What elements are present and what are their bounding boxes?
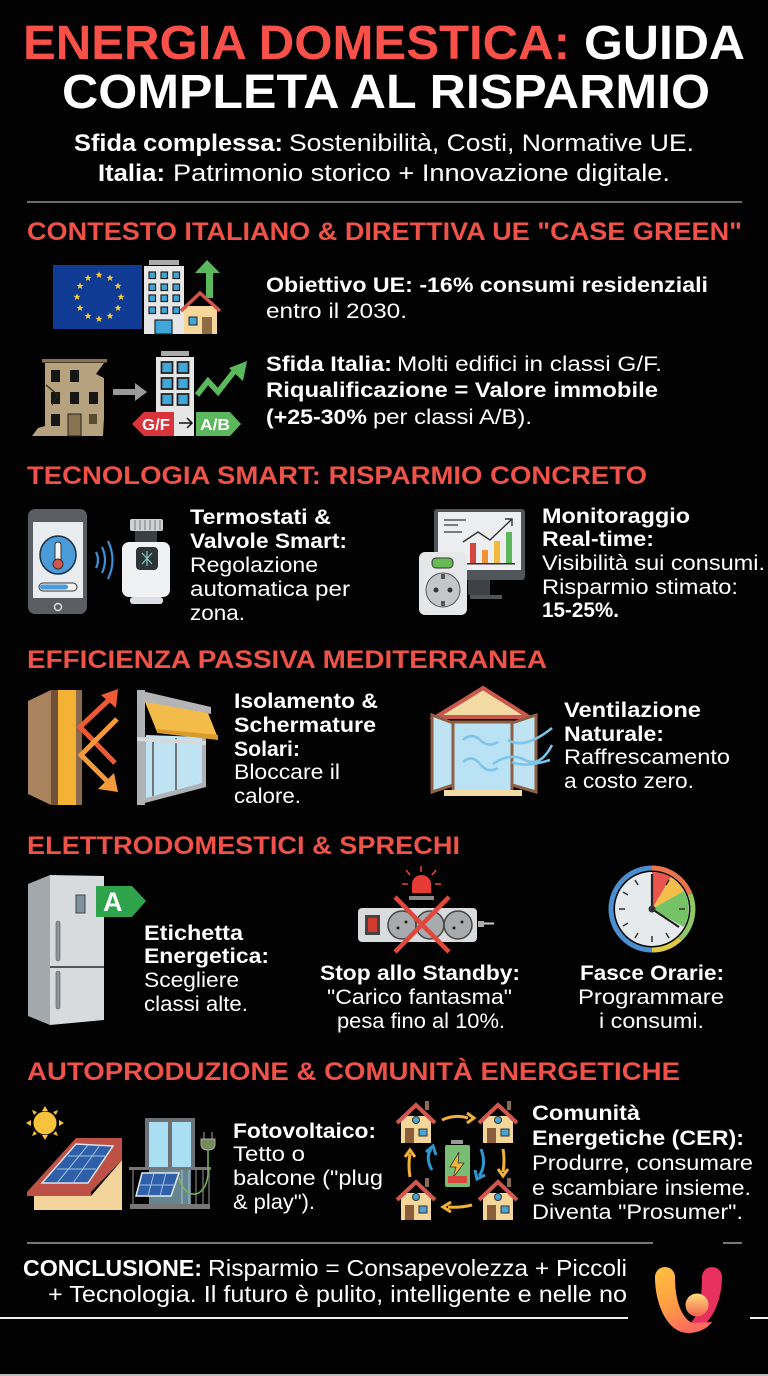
text: monitoraggio real-time: Monitoraggio <box>542 504 690 528</box>
exchange arrows <box>405 1113 508 1212</box>
text: fotovoltaico: Fotovoltaico: <box>233 1119 376 1143</box>
heading: contesto italiano: CONTESTO ITALIANO & DIRETTIVA UE "CASE GREEN" <box>27 218 742 246</box>
icon: wireless waves <box>96 541 112 579</box>
text: termostati e valvole: Valvole Smart: <box>190 529 347 553</box>
text: isolamento e schermature: Solari: <box>234 737 300 761</box>
ruined building <box>32 359 107 436</box>
power strip <box>358 908 494 942</box>
green up arrow <box>195 260 220 298</box>
icon: EU flag, building and house <box>53 260 220 334</box>
text: termostati e valvole: Termostati & <box>190 505 331 529</box>
text: etichetta energetica: Scegliere <box>144 968 239 992</box>
text: comunità energetiche: Diventa "Prosumer". <box>532 1200 743 1224</box>
icon: window with solar awning <box>137 690 218 805</box>
text: etichetta energetica: Etichetta <box>144 921 244 945</box>
text: comunità energetiche: e scambiare insieme. <box>532 1176 751 1200</box>
icon: monitor with chart and smart plug <box>419 509 525 615</box>
title: COMPLETA AL RISPARMIO <box>62 66 710 119</box>
apartment building <box>144 260 184 334</box>
text: ventilazione naturale: Ventilazione <box>564 698 701 722</box>
text: termostati e valvole: zona. <box>190 601 245 625</box>
text: isolamento e schermature <box>234 689 378 808</box>
text: isolamento e schermature: calore. <box>234 784 301 808</box>
text: etichetta energetica <box>144 921 269 1016</box>
icon: fridge with class A label <box>28 875 146 1025</box>
subtitle <box>74 130 694 187</box>
conclusion text: Risparmio = Consapevolezza + Piccoli <box>208 1255 627 1281</box>
sun <box>26 1106 64 1140</box>
icon: insulated wall reflecting heat <box>28 689 118 805</box>
heading: elettrodomestici: ELETTRODOMESTICI & SPRECHI <box>27 832 460 860</box>
text: sfida Italia: Riqualificazione = Valore immobile <box>266 378 658 402</box>
text: monitoraggio real-time: Visibilità sui consumi. <box>542 551 765 575</box>
text: obiettivo UE: Obiettivo UE: -16% consumi residenziali <box>266 273 708 297</box>
text: termostati e valvole: automatica per <box>190 577 350 601</box>
red cross <box>395 897 449 952</box>
text: obiettivo UE <box>266 273 708 323</box>
text: stop allo standby: Stop allo Standby: <box>320 961 520 985</box>
text: fasce orarie: Programmare <box>578 985 724 1009</box>
text: sfida Italia: per classi A/B). <box>373 405 532 429</box>
text: stop allo standby: pesa fino al 10%. <box>337 1009 505 1033</box>
icon: smartphone thermostat app <box>28 509 87 614</box>
text: sfida Italia: (+25-30% <box>266 405 367 429</box>
monitor chart <box>434 509 525 599</box>
text: stop allo standby: "Carico fantasma" <box>327 985 512 1009</box>
icon: sun and solar roof <box>26 1106 122 1210</box>
text: stop allo standby <box>320 961 520 1033</box>
text: ventilazione naturale: Naturale: <box>564 722 664 746</box>
text: fotovoltaico: Tetto o <box>233 1142 305 1166</box>
text: fotovoltaico: & play"). <box>233 1190 315 1214</box>
text: fasce orarie: Fasce Orarie: <box>580 961 724 985</box>
text: fasce orarie <box>578 961 724 1033</box>
icon: energy community houses and battery <box>397 1101 517 1220</box>
smart plug <box>419 552 467 615</box>
energy label A: A <box>103 887 122 917</box>
roof and solar panel <box>27 1138 122 1210</box>
text: monitoraggio real-time: Real-time: <box>542 527 654 551</box>
text: ventilazione naturale: Raffrescamento <box>564 745 730 769</box>
text: ventilazione naturale: a costo zero. <box>564 769 694 793</box>
logo badge <box>655 1267 722 1333</box>
title: GUIDA <box>584 17 745 70</box>
subtitle: Sfida complessa: <box>74 130 283 157</box>
energy class tag G/F <box>132 412 174 436</box>
text: fotovoltaico <box>233 1119 383 1214</box>
text: isolamento e schermature: Schermature <box>234 713 376 737</box>
icon: crossed power strip with siren <box>358 866 494 952</box>
energy class tag A/B <box>196 412 241 436</box>
text: comunità energetiche: Energetiche (CER): <box>532 1126 744 1150</box>
text: etichetta energetica: Energetica: <box>144 944 269 968</box>
subtitle: Patrimonio storico + Innovazione digitale. <box>173 160 670 187</box>
EU flag <box>53 265 142 329</box>
plug <box>201 1132 215 1150</box>
title: ENERGIA DOMESTICA: <box>23 17 570 70</box>
small house <box>181 293 220 334</box>
text: sfida Italia: Sfida Italia: <box>266 352 392 376</box>
grey arrow <box>113 383 147 401</box>
heading: tecnologia smart: TECNOLOGIA SMART: RISPARMIO CONCRETO <box>27 462 647 490</box>
text: monitoraggio real-time <box>542 504 765 622</box>
text: monitoraggio real-time: 15-25%. <box>542 598 619 622</box>
text: isolamento e schermature: Isolamento & <box>234 689 378 713</box>
icon: clock with time bands <box>611 868 693 950</box>
subtitle: Italia: <box>98 160 165 187</box>
title <box>23 17 745 119</box>
text: fasce orarie: i consumi. <box>599 1009 704 1033</box>
text: termostati e valvole <box>190 505 350 625</box>
siren <box>402 866 441 900</box>
conclusion text <box>23 1255 627 1307</box>
icon: renovation from ruin to efficient building <box>32 351 247 436</box>
text: comunità energetiche: Produrre, consumare <box>532 1151 753 1175</box>
text: isolamento e schermature: Bloccare il <box>234 760 340 784</box>
subtitle: Sostenibilità, Costi, Normative UE. <box>289 130 694 157</box>
energy class tag A/B: A/B <box>200 417 230 434</box>
text: comunità energetiche: Comunità <box>532 1101 641 1125</box>
energy class tag G/F: G/F <box>142 417 170 434</box>
text: ventilazione naturale <box>564 698 730 793</box>
text: sfida Italia <box>266 352 662 429</box>
energy label A <box>96 886 146 917</box>
heading: efficienza passiva: EFFICIENZA PASSIVA MEDITERRANEA <box>27 646 547 674</box>
conclusion text: + Tecnologia. Il futuro è pulito, intelligente e nelle no <box>48 1281 627 1307</box>
text: fotovoltaico: balcone ("plug <box>233 1166 383 1190</box>
battery <box>445 1140 470 1187</box>
green trend arrow <box>197 361 247 395</box>
heading: autoproduzione: AUTOPRODUZIONE & COMUNITÀ ENERGETICHE <box>27 1057 680 1086</box>
renovated building <box>156 351 194 436</box>
text: comunità energetiche <box>532 1101 753 1224</box>
text: obiettivo UE: entro il 2030. <box>266 299 407 323</box>
text: sfida Italia: Molti edifici in classi G/F. <box>397 352 662 376</box>
text: monitoraggio real-time: Risparmio stimato: <box>542 575 738 599</box>
icon: smart radiator valve <box>122 519 170 604</box>
text: etichetta energetica: classi alte. <box>144 992 248 1016</box>
text: termostati e valvole: Regolazione <box>190 553 318 577</box>
icon: open window with natural ventilation <box>432 688 552 796</box>
icon: balcony solar panel with plug <box>129 1118 215 1209</box>
conclusion text: CONCLUSIONE: <box>23 1255 202 1281</box>
